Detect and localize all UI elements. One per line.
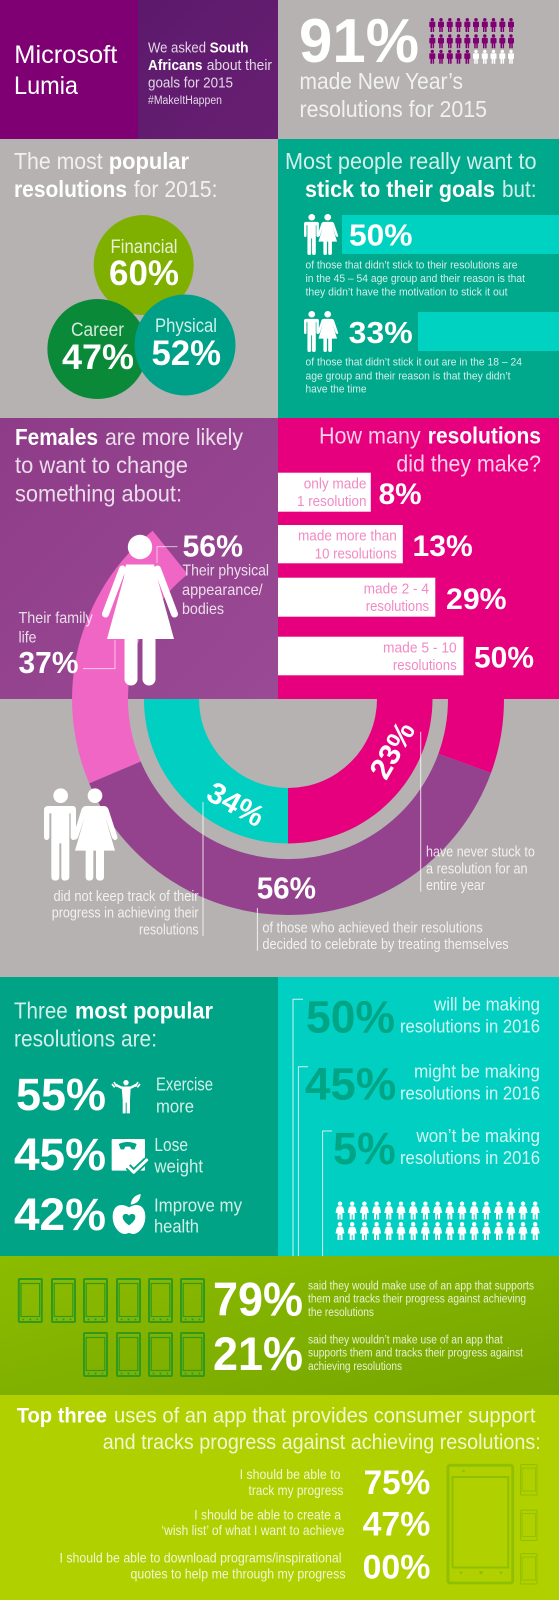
description xyxy=(308,1334,524,1373)
stat: 23 percent never stuck: a resolution for an xyxy=(426,860,528,877)
stat: might be making: might be making xyxy=(414,1062,540,1082)
row: download programs: I should be able to download programs/inspirational xyxy=(60,1550,342,1566)
row: wish list: ‘wish list’ of what I want to achieve xyxy=(162,1522,345,1538)
females heading: something about: xyxy=(15,481,182,507)
stat: exercise more: Exercise xyxy=(156,1075,213,1095)
icon: six phones xyxy=(19,1279,204,1322)
stat: 56 percent celebrate: 56% xyxy=(257,870,316,905)
row: track progress: track my progress xyxy=(248,1482,343,1498)
outer arc: purple 56 percent xyxy=(89,754,491,915)
row: wish list: 47% xyxy=(363,1506,430,1544)
icon: people rows xyxy=(336,1202,540,1240)
intro text: Africans xyxy=(148,57,202,74)
females heading xyxy=(15,424,243,507)
row: track progress: I should be able to xyxy=(240,1466,341,1482)
how many resolutions heading: did they make? xyxy=(396,451,541,477)
row: track progress: 75% xyxy=(364,1464,430,1502)
stat: lose weight: Lose xyxy=(154,1135,188,1155)
callout: family life: life xyxy=(18,630,37,647)
stat: 23 percent never stuck: 23% xyxy=(364,716,422,785)
panel: app usage xyxy=(0,1256,559,1395)
heading: but: xyxy=(502,176,536,202)
brand name xyxy=(14,41,117,100)
bar: 2 to 4 resolutions: resolutions xyxy=(366,599,429,615)
bar: only made 1 resolution xyxy=(278,473,422,512)
icon: couple xyxy=(304,214,338,255)
stat: 34 percent did not keep track: 34% xyxy=(201,776,270,834)
bar: more than 10 resolutions: 10 resolutions xyxy=(315,546,397,562)
panel: survey intro xyxy=(138,0,278,139)
bar: more than 10 resolutions: 13% xyxy=(412,530,473,563)
icon: large phone xyxy=(448,1465,513,1583)
heading: Most people really want to xyxy=(285,148,536,174)
bar: 5 to 10 resolutions xyxy=(278,637,534,675)
callout: physical appearance: bodies xyxy=(182,601,224,618)
bar: 5 to 10 resolutions: resolutions xyxy=(393,658,457,674)
circle: physical: 52% xyxy=(152,334,221,373)
panel: progress background xyxy=(0,699,559,977)
stat: won't be making: won’t be making xyxy=(415,1126,540,1146)
bracket lines xyxy=(293,999,332,1256)
donut chart xyxy=(72,531,504,915)
row: download programs xyxy=(60,1548,430,1586)
circle: physical xyxy=(134,294,236,396)
icon: people pictogram xyxy=(429,18,514,64)
heading: most popular xyxy=(75,997,213,1023)
heading: for 2015: xyxy=(134,176,218,202)
stat: improve my health: 42% xyxy=(14,1189,106,1240)
callout: family life xyxy=(18,610,115,680)
heading: Three xyxy=(14,997,68,1023)
outer arc: light pink 37 percent xyxy=(72,531,188,783)
females heading: are more likely xyxy=(105,424,243,450)
stat 33%: 33% xyxy=(349,315,413,350)
circle: career: 47% xyxy=(62,338,134,377)
description xyxy=(308,1280,534,1319)
stat 50%: 50% xyxy=(349,218,412,253)
stat: exercise more: 55% xyxy=(16,1069,106,1120)
stat: lose weight: weight xyxy=(153,1156,203,1176)
how many resolutions heading xyxy=(319,422,541,477)
description: said they would make use of an app that supports xyxy=(308,1280,534,1292)
stat: 56 percent celebrate xyxy=(257,870,509,953)
icon: four phones xyxy=(84,1333,204,1376)
row: track progress xyxy=(240,1464,430,1502)
heading: popular xyxy=(109,148,189,174)
stat: exercise more: more xyxy=(156,1096,194,1116)
stat: 23 percent never stuck xyxy=(364,716,535,894)
bar: 2 to 4 resolutions: made 2 - 4 xyxy=(364,581,429,597)
bar: 5 to 10 resolutions: made 5 - 10 xyxy=(383,640,457,656)
panel: top three uses xyxy=(0,1395,559,1600)
heading: resolutions are: xyxy=(14,1026,157,1052)
intro text: We asked xyxy=(148,40,206,57)
stat: will be making: 50% xyxy=(306,991,395,1042)
bar: 2 to 4 resolutions xyxy=(278,578,507,617)
icon: scale with check xyxy=(112,1139,147,1172)
description: them and tracks their progress against achieving xyxy=(308,1294,526,1306)
description: supports them and tracks their progress against xyxy=(308,1348,524,1360)
how many resolutions heading: resolutions xyxy=(428,422,541,448)
row: download programs: 00% xyxy=(363,1548,430,1586)
bar: only made 1 resolution: 8% xyxy=(379,478,422,511)
stat: won't be making: resolutions in 2016 xyxy=(400,1148,540,1168)
bar: only made 1 resolution: only made xyxy=(304,476,366,492)
females heading: to want to change xyxy=(15,452,188,478)
bar: 50 percent xyxy=(342,215,559,254)
icon: apple with heart xyxy=(113,1194,145,1234)
big stat 91%: 91% xyxy=(299,7,419,76)
description: of those that didn’t stick to their resolutions are xyxy=(306,260,518,272)
caption: made New Year’s xyxy=(300,68,463,94)
stat: 34 percent did not keep track: progress in achieving their xyxy=(52,905,199,922)
circle: career xyxy=(47,299,147,399)
heading: Top three xyxy=(17,1404,107,1427)
bar: 5 to 10 resolutions: 50% xyxy=(474,642,534,675)
stat: won't be making xyxy=(333,1123,540,1174)
intro text xyxy=(148,40,272,107)
icon: small phones xyxy=(521,1465,537,1584)
stat 79%: 79% xyxy=(213,1273,303,1326)
stat: might be making: resolutions in 2016 xyxy=(400,1083,540,1103)
bar: only made 1 resolution: 1 resolution xyxy=(297,494,366,510)
stat: 23 percent never stuck: entire year xyxy=(426,877,485,894)
bar: 33 percent xyxy=(418,312,559,351)
panel: 91 percent xyxy=(278,0,559,139)
callout: family life: Their family xyxy=(18,610,93,627)
panel: females background xyxy=(0,418,278,699)
outer arc: magenta xyxy=(438,699,504,773)
stat: improve my health: health xyxy=(154,1216,199,1236)
stat: 56 percent celebrate: decided to celebrate by treating themselves xyxy=(262,936,509,953)
stat: improve my health xyxy=(14,1189,242,1240)
brand name: Microsoft xyxy=(14,41,117,69)
icon: couple xyxy=(304,311,338,352)
callout: physical appearance: appearance/ xyxy=(182,582,263,599)
brand name: Lumia xyxy=(14,72,78,100)
bar: 2 to 4 resolutions: 29% xyxy=(446,583,507,616)
stat: 56 percent celebrate: of those who achieved their resolutions xyxy=(262,919,483,936)
heading: and tracks progress against achieving resolutions: xyxy=(103,1431,541,1454)
heading xyxy=(17,1404,541,1454)
stat: 34 percent did not keep track: resolutions xyxy=(139,921,199,938)
heading: stick to their goals xyxy=(305,176,495,202)
stat: will be making: will be making xyxy=(433,995,540,1015)
description: the resolutions xyxy=(308,1307,374,1319)
circle: financial: Financial xyxy=(110,237,178,258)
circle: financial: 60% xyxy=(109,254,179,293)
heading xyxy=(285,148,536,202)
stat: 23 percent never stuck: have never stuck to xyxy=(426,844,535,861)
description: achieving resolutions xyxy=(308,1361,402,1373)
stat: will be making: resolutions in 2016 xyxy=(400,1016,540,1036)
row: download programs: quotes to help me through my progress xyxy=(130,1565,346,1581)
bar: more than 10 resolutions: made more than xyxy=(298,529,397,545)
stat: won't be making: 5% xyxy=(333,1123,396,1174)
heading: uses of an app that provides consumer support xyxy=(114,1404,536,1427)
intro text: #MakeItHappen xyxy=(148,95,222,107)
description: age group and their reason is that they didn’t xyxy=(306,370,510,382)
females heading: Females xyxy=(15,424,98,450)
row: wish list: I should be able to create a xyxy=(194,1506,341,1522)
stat: might be making: 45% xyxy=(305,1058,396,1109)
icon: exercise figure xyxy=(112,1080,140,1113)
row: wish list xyxy=(162,1506,430,1544)
caption: resolutions for 2015 xyxy=(300,96,487,122)
icon: couple xyxy=(44,788,117,881)
panel: how many resolutions background xyxy=(278,418,559,699)
heading: resolutions xyxy=(14,176,127,202)
stat: improve my health: Improve my xyxy=(154,1196,242,1216)
description: in the 45 – 54 age group and their reason is that xyxy=(306,273,525,285)
description xyxy=(306,260,525,299)
panel: three most popular xyxy=(0,977,278,1256)
description: they didn’t have the motivation to stick it out xyxy=(306,287,508,299)
callout: physical appearance: 56% xyxy=(182,529,243,564)
intro text: about their xyxy=(207,57,272,74)
panel: Microsoft Lumia brand xyxy=(0,0,138,139)
description: of those that didn’t stick it out are in the 18 – 24 xyxy=(306,357,522,369)
stat: might be making xyxy=(305,1058,540,1109)
circle: physical: Physical xyxy=(155,316,217,337)
circle: career: Career xyxy=(71,320,125,341)
icon: woman xyxy=(106,535,174,679)
callout: physical appearance: Their physical xyxy=(182,563,269,580)
caption xyxy=(300,68,487,122)
heading xyxy=(14,997,213,1052)
callout: family life: 37% xyxy=(18,645,78,680)
stat: will be making xyxy=(306,991,540,1042)
heading xyxy=(14,148,218,202)
description xyxy=(306,357,522,396)
inner arc: magenta 23 percent xyxy=(288,699,432,844)
panel: making resolutions in 2016 xyxy=(278,977,559,1256)
panel: stick to goals xyxy=(278,139,559,418)
stat: lose weight: 45% xyxy=(14,1129,106,1180)
bar: more than 10 resolutions xyxy=(278,525,473,563)
callout: physical appearance xyxy=(157,529,269,618)
stat: exercise more xyxy=(16,1069,213,1120)
stat: lose weight xyxy=(14,1129,203,1180)
intro text: goals for 2015 xyxy=(148,75,233,92)
intro text: South xyxy=(210,40,249,57)
description: said they wouldn’t make use of an app that xyxy=(308,1334,503,1346)
circle: financial xyxy=(94,215,194,315)
description: have the time xyxy=(306,384,366,396)
stat: 34 percent did not keep track: did not keep track of their xyxy=(54,888,199,905)
inner arc: teal 34 percent xyxy=(144,699,288,844)
stat 21%: 21% xyxy=(213,1327,303,1380)
stat: 34 percent did not keep track xyxy=(52,776,270,938)
heading: The most xyxy=(14,148,103,174)
how many resolutions heading: How many xyxy=(319,422,421,448)
panel: most popular resolutions xyxy=(0,139,278,418)
